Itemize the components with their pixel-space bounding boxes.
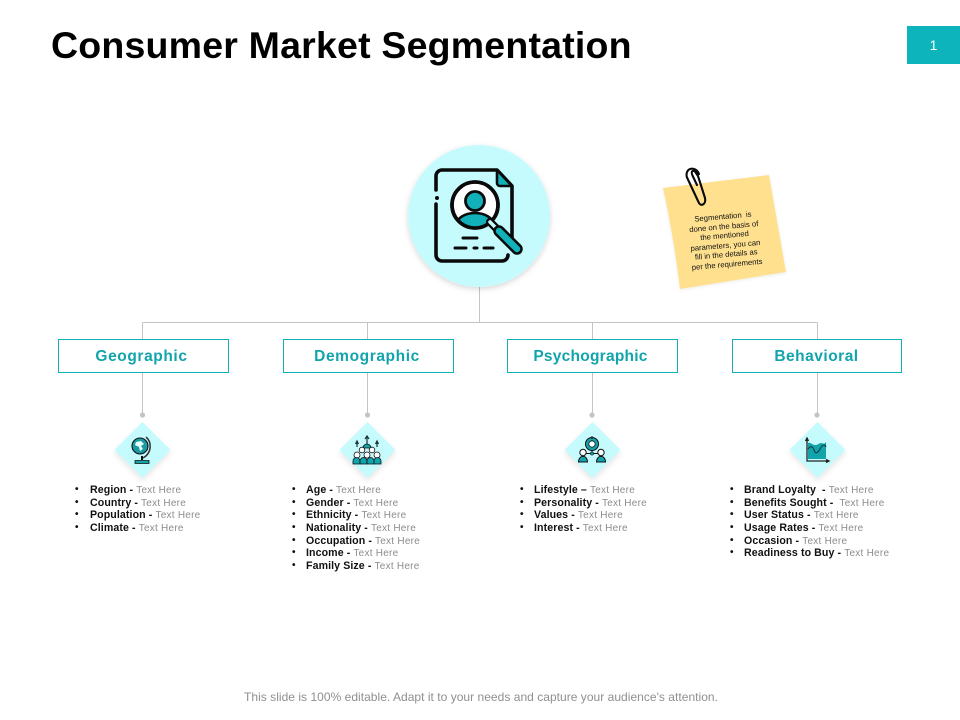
list: behavioral: • xyxy=(730,484,734,495)
note text: parameters, you can xyxy=(690,238,761,253)
category heading: Demographic: Demographic xyxy=(314,348,420,365)
list: behavioral: • xyxy=(730,547,734,558)
list: demographic: • xyxy=(292,497,296,508)
page number badge: 1 xyxy=(930,37,937,53)
note text xyxy=(689,210,763,272)
list: demographic: • xyxy=(292,509,296,520)
category heading: Geographic: Geographic xyxy=(95,348,188,365)
list: behavioral: • xyxy=(730,509,734,520)
category heading: Geographic xyxy=(58,339,229,373)
list: demographic: Occupation - Text Here xyxy=(306,535,420,547)
category heading: Behavioral: Behavioral xyxy=(774,348,859,365)
list: demographic: • xyxy=(292,522,296,533)
sticky note xyxy=(663,168,786,290)
list: geographic xyxy=(75,484,200,534)
list: geographic: • xyxy=(75,509,79,520)
list: demographic: • xyxy=(292,547,296,558)
title: Consumer Market Segmentation xyxy=(51,24,632,66)
list: demographic xyxy=(292,484,420,572)
list: psychographic: • xyxy=(520,509,524,520)
page number badge xyxy=(907,26,960,64)
list: geographic: • xyxy=(75,484,79,495)
list: behavioral: Benefits Sought - Text Here xyxy=(744,497,885,509)
list: demographic: Ethnicity - Text Here xyxy=(306,509,406,521)
list: geographic: • xyxy=(75,522,79,533)
note paper and paperclip xyxy=(663,168,786,290)
list: behavioral: User Status - Text Here xyxy=(744,509,859,521)
list: demographic: Income - Text Here xyxy=(306,547,398,559)
list: demographic: • xyxy=(292,560,296,571)
list: geographic: Region - Text Here xyxy=(90,484,181,496)
category heading: Demographic xyxy=(283,339,454,373)
list: behavioral: • xyxy=(730,535,734,546)
category heading: Behavioral xyxy=(732,339,902,373)
list: geographic: Country - Text Here xyxy=(90,497,186,509)
icon: target with people in diamond xyxy=(564,422,620,480)
list: behavioral: Brand Loyalty - Text Here xyxy=(744,484,874,496)
list: psychographic: Lifestyle – Text Here xyxy=(534,484,635,496)
list: behavioral xyxy=(730,484,889,559)
list: demographic: Age - Text Here xyxy=(306,484,381,496)
category heading: Psychographic: Psychographic xyxy=(533,348,648,365)
list: behavioral: • xyxy=(730,497,734,508)
list: geographic: Population - Text Here xyxy=(90,509,200,521)
list: behavioral: • xyxy=(730,522,734,533)
note text: done on the basis of xyxy=(689,219,759,234)
list: demographic: Nationality - Text Here xyxy=(306,522,416,534)
list: behavioral: Usage Rates - Text Here xyxy=(744,522,863,534)
icon: central circle with document and magnifier xyxy=(406,145,552,291)
list: behavioral: Readiness to Buy - Text Here xyxy=(744,547,889,559)
category heading: Psychographic xyxy=(507,339,678,373)
list: behavioral: Occasion - Text Here xyxy=(744,535,847,547)
list: psychographic: • xyxy=(520,484,524,495)
list: demographic: Family Size - Text Here xyxy=(306,560,420,572)
list: psychographic: Personality - Text Here xyxy=(534,497,647,509)
list: demographic: Gender - Text Here xyxy=(306,497,398,509)
list: demographic: • xyxy=(292,535,296,546)
note text: per the requirements xyxy=(691,257,763,272)
list: geographic: • xyxy=(75,497,79,508)
icon: group with arrows in diamond xyxy=(340,422,396,480)
icon: globe in diamond xyxy=(114,422,170,480)
list: psychographic: Values - Text Here xyxy=(534,509,623,521)
footer note: This slide is 100% editable. Adapt it to your needs and capture your audience's attention. xyxy=(244,690,718,704)
icon: area chart in diamond xyxy=(790,422,846,480)
note text: fill in the details as xyxy=(695,248,758,262)
list: psychographic: Interest - Text Here xyxy=(534,522,628,534)
note text: Segmentation is xyxy=(694,210,752,224)
list: demographic: • xyxy=(292,484,296,495)
list: geographic: Climate - Text Here xyxy=(90,522,184,534)
note text: the mentioned xyxy=(700,229,749,242)
list: psychographic: • xyxy=(520,522,524,533)
list: psychographic: • xyxy=(520,497,524,508)
list: psychographic xyxy=(520,484,647,534)
